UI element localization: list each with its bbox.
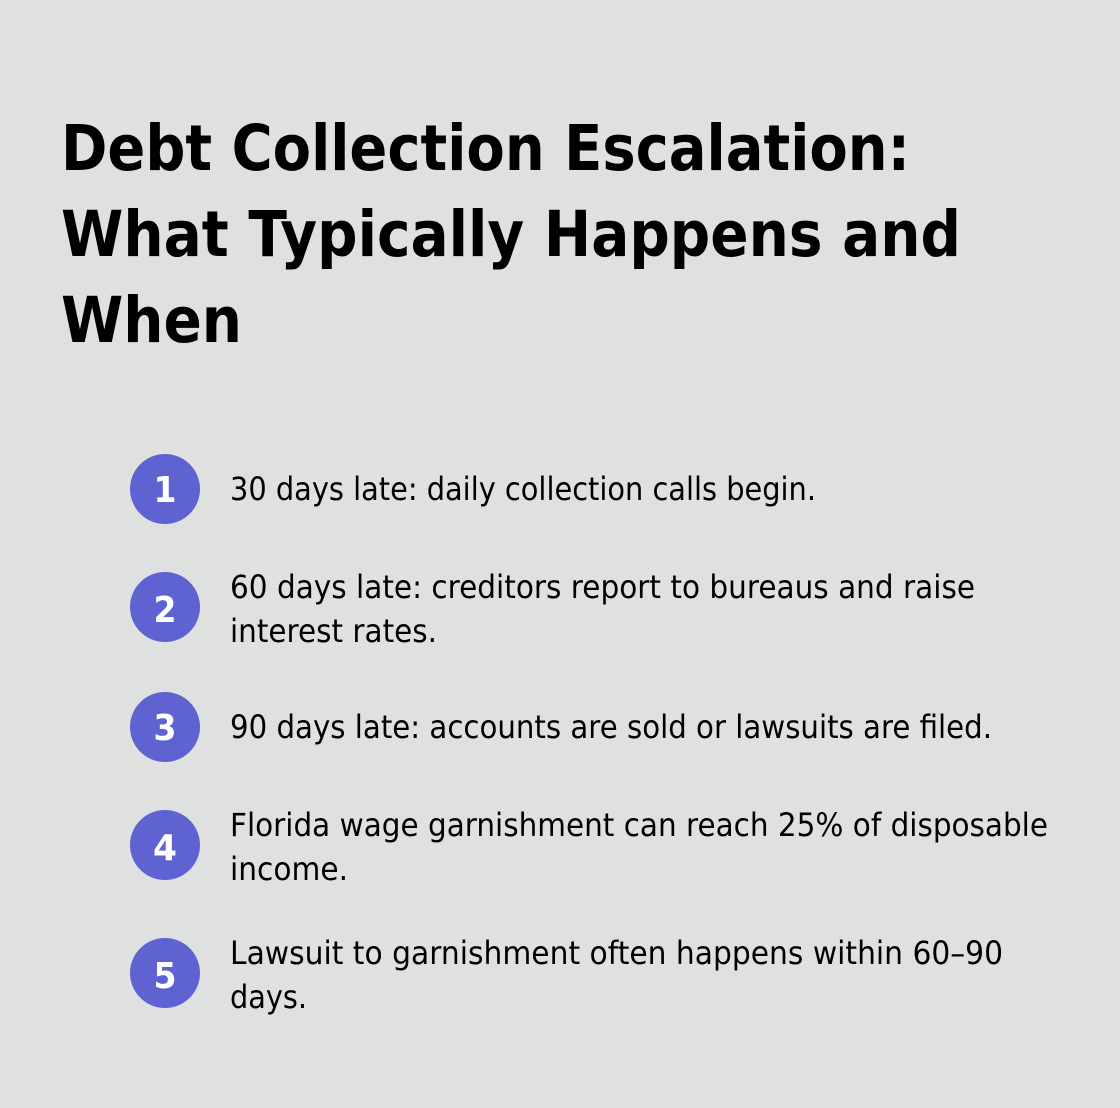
step 4 badge [130,810,200,880]
title: What Typically Happens and [61,198,961,271]
step 5 text: Lawsuit to garnishment often happens within 60–90 [230,934,1003,972]
step 5 text: days. [230,978,307,1016]
step 1 text: 30 days late: daily collection calls begin. [230,470,816,508]
title [61,112,961,357]
step 2 text [230,568,975,650]
step 2 [130,568,975,650]
step 2 badge [130,572,200,642]
step 2 text: interest rates. [230,612,437,650]
step 4 text: Florida wage garnishment can reach 25% of disposable [230,806,1048,844]
step 2 text: 60 days late: creditors report to bureaus and raise [230,568,975,606]
step 3 [130,692,992,762]
step 1 [130,454,816,524]
step 3 badge [130,692,200,762]
step 5 badge: 5 [154,956,176,997]
step 4 text [230,806,1048,888]
step 5 badge [130,938,200,1008]
title: When [61,284,242,357]
step 1 badge: 1 [154,470,176,511]
step 3 text: 90 days late: accounts are sold or lawsuits are filed. [230,708,992,746]
step 2 badge: 2 [154,590,176,631]
step 3 badge: 3 [154,708,176,749]
step 4 badge: 4 [153,828,177,869]
step 1 badge [130,454,200,524]
step 4 [130,806,1048,888]
title: Debt Collection Escalation: [61,112,910,185]
step 5 [130,934,1003,1016]
step 5 text [230,934,1003,1016]
step 4 text: income. [230,850,348,888]
